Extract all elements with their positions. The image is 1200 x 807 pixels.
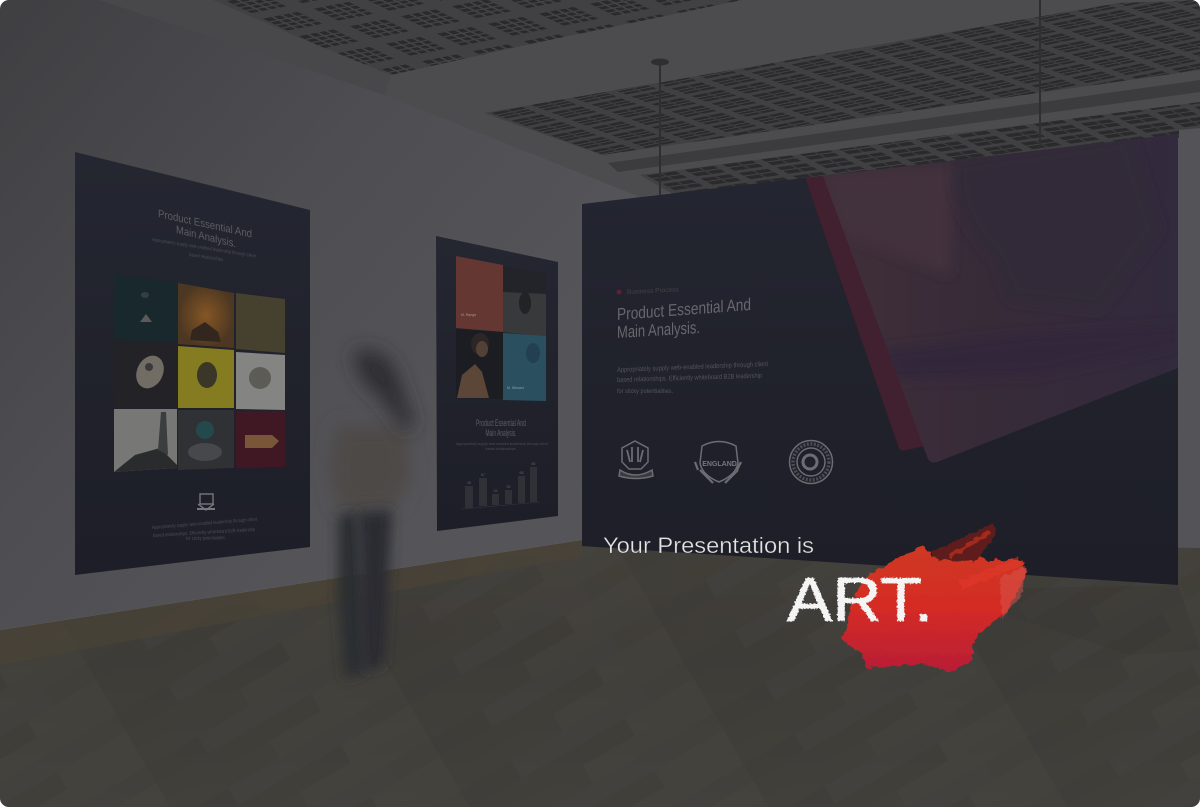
right wall sliver <box>1179 128 1200 138</box>
back pink card <box>805 170 930 451</box>
poster: left <box>75 152 310 575</box>
poster 2 bar chart <box>462 462 540 509</box>
big panel eyebrow <box>616 288 678 294</box>
left wall <box>0 0 1200 640</box>
big panel paragraph <box>617 361 768 395</box>
big panel paragraph: for sticky potentialities. <box>617 388 673 395</box>
poster 2 small text <box>456 442 548 451</box>
badge: England shield: ENGLAND <box>702 461 737 468</box>
big panel eyebrow: Business Process <box>627 286 679 296</box>
poster 2 bar chart: 26 <box>494 489 497 493</box>
tagline text: Your Presentation is <box>603 533 814 558</box>
ceiling stripe <box>608 80 1200 172</box>
poster 2 bar chart: 35 <box>507 485 510 489</box>
photo figure shapes <box>889 167 964 377</box>
poster 2 image grid <box>456 256 546 401</box>
poster 1 logo icon <box>197 494 215 510</box>
floor <box>0 540 1200 807</box>
ceiling tiles: lower band <box>640 102 1200 197</box>
large hanging panel <box>582 134 1178 585</box>
poster 2 heading: Main Analysis. <box>486 428 516 438</box>
big panel paragraph: Appropriately supply web-enabled leadership through client <box>617 361 768 374</box>
big panel heading: Main Analysis. <box>617 318 700 342</box>
big panel paragraph: based relationships. Efficiently whiteboard B2B leadership <box>617 373 762 384</box>
badge: wine festival <box>790 440 832 484</box>
badge: crest <box>619 441 653 478</box>
poster 1 footer text: Appropriately supply web-enabled leadership through client <box>152 517 257 531</box>
poster 1 heading: Main Analysis. <box>176 224 236 250</box>
ART headline: ART. <box>787 566 933 635</box>
poster 2 bar chart: 68 <box>520 471 523 475</box>
poster 1 intro text: based relationships. <box>189 252 224 263</box>
poster 2 bar chart: 85 <box>532 462 535 466</box>
poster 1 footer text: based relationships. Efficiently whiteboard B2B leadership <box>153 527 255 539</box>
hanging rods <box>651 0 1041 196</box>
ceiling tiles: upper left <box>213 0 742 75</box>
poster 1 footer text <box>152 517 257 542</box>
badge: England shield <box>695 442 741 483</box>
ceiling plane <box>518 0 1200 197</box>
poster 2 bar chart: 45 <box>467 481 471 485</box>
poster 2 image grid: M. Range <box>461 313 476 317</box>
poster: middle <box>436 236 558 531</box>
poster 1 footer text: for sticky potentialities. <box>186 535 226 542</box>
front photo card <box>823 134 1178 463</box>
poster 2 bar chart: 67 <box>481 473 485 477</box>
poster 2 small text: Appropriately supply web-enabled leadership through client <box>456 442 548 446</box>
poster 2 small text: based relationships. <box>485 447 517 451</box>
poster 2 heading <box>476 418 526 438</box>
ceiling tiles: middle band <box>484 0 1200 155</box>
poster 1 image grid <box>114 274 285 472</box>
poster 2 image grid: M. Stewart <box>507 386 524 390</box>
red brush stroke <box>842 523 1026 672</box>
big panel heading <box>618 298 750 338</box>
poster 1 intro text: Appropriately supply web-enabled leadership through client <box>152 237 256 260</box>
big panel heading: Product Essential And <box>617 295 751 324</box>
poster 2 heading: Product Essential And <box>476 418 526 428</box>
blurred standing figure <box>328 350 415 680</box>
ceiling beam shadow <box>100 0 391 95</box>
poster 1 heading: Product Essential And <box>158 208 252 241</box>
